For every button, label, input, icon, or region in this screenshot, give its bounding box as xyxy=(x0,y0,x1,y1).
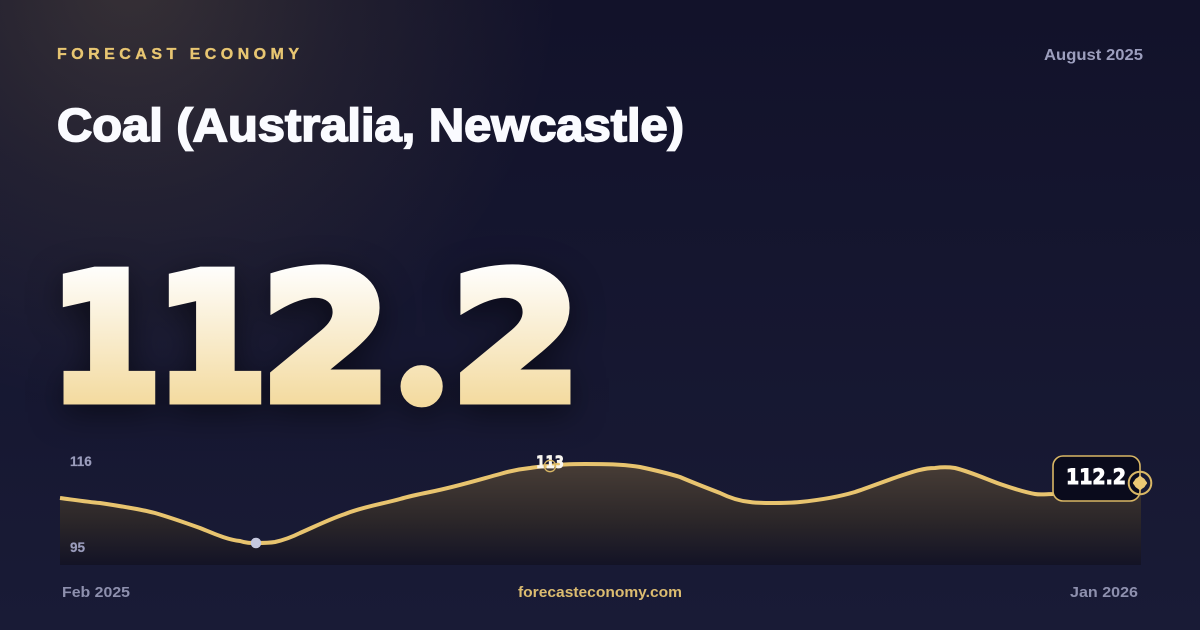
brand kicker: FORECAST ECONOMY xyxy=(57,46,299,63)
title: Coal (Australia, Newcastle) xyxy=(57,99,684,151)
low point marker xyxy=(251,538,261,548)
current value callout xyxy=(1053,456,1140,501)
big value: 2 xyxy=(261,239,391,441)
axis min label: 95 xyxy=(70,540,86,555)
website: forecasteconomy.com xyxy=(518,585,682,601)
big value: 1 xyxy=(50,239,161,441)
big value: 2 xyxy=(451,239,581,441)
area fill xyxy=(60,464,1141,565)
axis max label: 116 xyxy=(70,454,92,469)
high point label: 113 xyxy=(536,453,564,473)
area chart xyxy=(60,464,1141,565)
date: August 2025 xyxy=(1044,47,1143,64)
big value xyxy=(50,218,581,445)
end date label: Jan 2026 xyxy=(1070,585,1138,601)
big value: . xyxy=(396,218,447,445)
current value callout: 112.2 xyxy=(1066,465,1126,490)
start date label: Feb 2025 xyxy=(62,585,130,601)
current value marker xyxy=(1129,472,1151,494)
big value: 1 xyxy=(156,239,267,441)
price line xyxy=(60,464,1140,543)
